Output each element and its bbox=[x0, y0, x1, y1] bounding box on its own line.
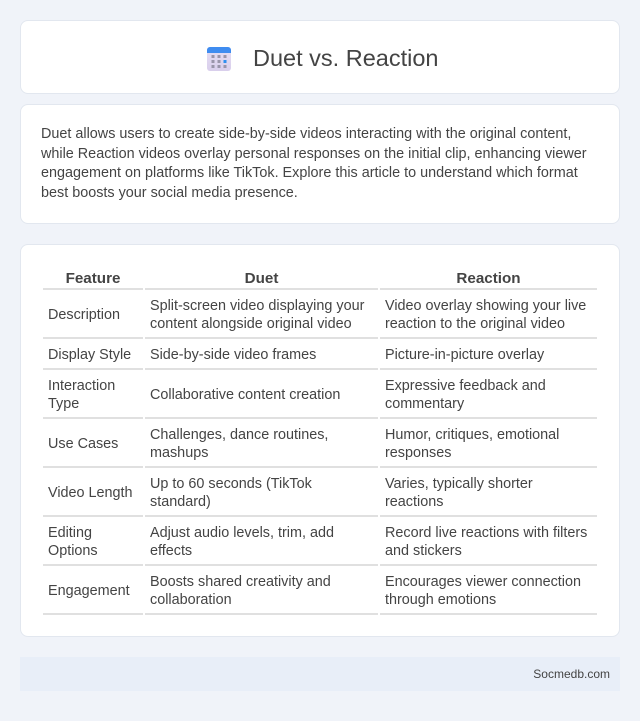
row: use cases: Challenges, dance routines, bbox=[150, 427, 328, 443]
row: description: reaction to the original video bbox=[385, 316, 565, 332]
row: use cases: Use Cases bbox=[48, 436, 118, 452]
row: display style bbox=[43, 347, 597, 370]
icon: calendar bbox=[207, 47, 231, 71]
row: interaction type: Expressive feedback and bbox=[385, 378, 546, 394]
row: video length: Video Length bbox=[48, 485, 133, 501]
row: engagement: Engagement bbox=[48, 583, 130, 599]
row: editing options: Editing bbox=[48, 525, 92, 541]
row: video length: Up to 60 seconds (TikTok bbox=[150, 476, 312, 492]
table header: Reaction bbox=[456, 270, 521, 287]
row: engagement: Boosts shared creativity and bbox=[150, 574, 331, 590]
row: use cases: responses bbox=[385, 445, 451, 461]
footer bar bbox=[20, 657, 620, 691]
row: engagement bbox=[43, 574, 597, 615]
row: engagement: collaboration bbox=[150, 592, 232, 608]
row: display style: Picture-in-picture overlay bbox=[385, 347, 544, 363]
intro paragraph: Duet allows users to create side-by-side videos interacting with the original content, bbox=[41, 126, 571, 142]
table header bbox=[43, 270, 597, 290]
row: interaction type: Collaborative content creation bbox=[150, 387, 340, 403]
row: editing options: Record live reactions with filters bbox=[385, 525, 587, 541]
row: description: content alongside original video bbox=[150, 316, 352, 332]
title card bbox=[20, 20, 620, 94]
row: editing options: effects bbox=[150, 543, 192, 559]
row: description bbox=[43, 298, 597, 339]
row: video length: reactions bbox=[385, 494, 443, 510]
row: interaction type bbox=[43, 378, 597, 419]
table header: Duet bbox=[245, 270, 278, 287]
intro paragraph bbox=[41, 126, 587, 200]
row: use cases bbox=[43, 427, 597, 468]
row: use cases: Humor, critiques, emotional bbox=[385, 427, 559, 443]
row: use cases: mashups bbox=[150, 445, 208, 461]
row: editing options: and stickers bbox=[385, 543, 462, 559]
row: interaction type: Type bbox=[48, 396, 79, 412]
row: interaction type: commentary bbox=[385, 396, 464, 412]
row: display style: Display Style bbox=[48, 347, 131, 363]
row: video length: standard) bbox=[150, 494, 211, 510]
row: editing options: Adjust audio levels, trim, add bbox=[150, 525, 334, 541]
intro paragraph: engagement on platforms like TikTok. Explore this article to understand which format bbox=[41, 165, 578, 181]
row: description: Description bbox=[48, 307, 120, 323]
row: description: Split-screen video displaying your bbox=[150, 298, 364, 314]
row: engagement: through emotions bbox=[385, 592, 496, 608]
footer credit: Socmedb.com bbox=[533, 667, 610, 681]
row: editing options: Options bbox=[48, 543, 98, 559]
row: interaction type: Interaction bbox=[48, 378, 115, 394]
comparison table panel bbox=[20, 244, 620, 637]
row: editing options bbox=[43, 525, 597, 566]
row: display style: Side-by-side video frames bbox=[150, 347, 316, 363]
heading: Duet vs. Reaction bbox=[253, 45, 438, 71]
row: description: Video overlay showing your live bbox=[385, 298, 586, 314]
row: video length bbox=[43, 476, 597, 517]
row: video length: Varies, typically shorter bbox=[385, 476, 533, 492]
table header: Feature bbox=[66, 270, 120, 287]
intro text panel bbox=[20, 104, 620, 224]
row: engagement: Encourages viewer connection bbox=[385, 574, 581, 590]
intro paragraph: while Reaction videos overlay personal responses on the initial clip, enhancing viewer bbox=[41, 146, 587, 162]
intro paragraph: best boosts your social media presence. bbox=[41, 184, 298, 200]
